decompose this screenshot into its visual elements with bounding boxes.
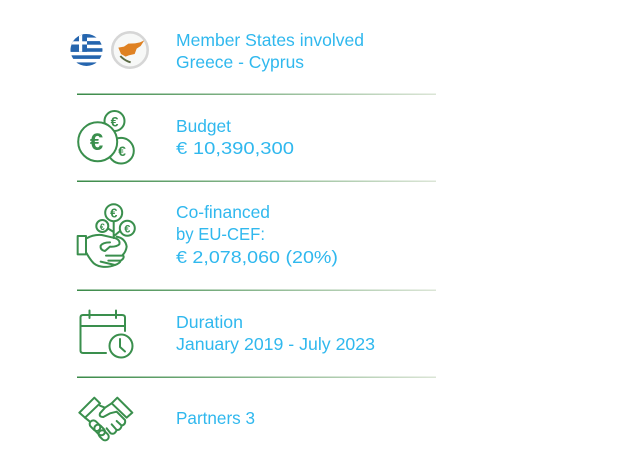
- text: member states: Member States involved: [176, 30, 364, 50]
- text: partners: Partners 3: [176, 408, 255, 428]
- text: duration: [176, 312, 375, 354]
- icon: euro coins: [78, 111, 134, 164]
- text: co-financing: [176, 202, 338, 267]
- icon: hand with euro plant: €: [124, 224, 130, 236]
- text: budget: [176, 116, 294, 158]
- icon: euro coins: €: [111, 114, 119, 130]
- icon: euro coins: €: [118, 143, 126, 159]
- text: co-financing: by EU-CEF:: [176, 224, 265, 244]
- icon: calendar with clock: [80, 310, 132, 358]
- icon: handshake: [79, 398, 132, 442]
- text: member states: [176, 30, 364, 72]
- icon: hand with euro plant: [78, 204, 135, 267]
- text: duration: January 2019 - July 2023: [176, 334, 375, 354]
- icon: hand with euro plant: €: [110, 206, 117, 220]
- icon: euro coins: €: [90, 129, 103, 156]
- icon: flag of Greece: [70, 34, 103, 66]
- text: budget: Budget: [176, 116, 231, 136]
- text: co-financing: Co-financed: [176, 202, 270, 222]
- text: duration: Duration: [176, 312, 243, 332]
- text: co-financing: € 2,078,060 (20%): [176, 247, 338, 267]
- icon: hand with euro plant: €: [100, 222, 105, 232]
- text: budget: € 10,390,300: [176, 138, 294, 158]
- infographic: [70, 31, 436, 442]
- text: member states: Greece - Cyprus: [176, 52, 304, 72]
- icon: flag of Cyprus: [112, 32, 148, 68]
